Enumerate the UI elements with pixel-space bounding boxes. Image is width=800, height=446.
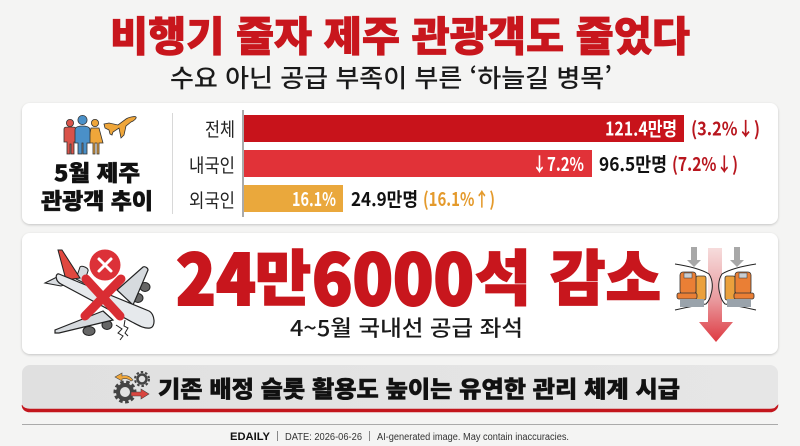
bar chart: total: 전체: [205, 115, 235, 142]
bar chart: domestic: ↓7.2%: [532, 150, 584, 177]
footer: DATE: 2026-06-26: [285, 432, 362, 443]
main figure: 감소: [550, 231, 661, 318]
bar chart: foreign: 24.9만명: [351, 185, 418, 212]
bar chart: total: (3.2%↓): [691, 114, 760, 142]
main figure: [176, 225, 661, 326]
bar chart: domestic: [189, 150, 738, 178]
panel: policy message: [22, 365, 778, 412]
panel heading: 관광객 추이: [41, 184, 153, 216]
figure caption: 4~5월 국내선 공급 좌석: [290, 311, 523, 343]
bar chart: domestic: 96.5만명: [599, 150, 667, 177]
icon: grounded airplane: [45, 250, 154, 340]
policy text: 기존 배정 슬롯 활용도 높이는 유연한 관리 체계 시급: [158, 370, 680, 404]
footer: EDAILY: [230, 431, 271, 443]
bar chart: total: [205, 114, 760, 142]
icon: seats and down arrow: [675, 247, 756, 342]
panel heading: [41, 156, 153, 216]
main figure: 6000: [312, 225, 474, 326]
main figure: 24: [176, 225, 256, 326]
icon: family and airplane: [64, 115, 136, 154]
panel heading: 5월 제주: [54, 156, 140, 188]
bar chart: foreign: 외국인: [189, 186, 235, 213]
bar chart: foreign: (16.1%↑): [423, 185, 495, 212]
bar chart: foreign: [189, 185, 495, 213]
bar chart: domestic: (7.2%↓): [672, 150, 738, 177]
footer: [230, 431, 569, 443]
subtitle: 수요 아닌 공급 부족이 부른 ‘하늘길 병목’: [170, 59, 612, 95]
bar chart: total: 121.4만명: [605, 114, 677, 142]
bar chart: foreign: 16.1%: [292, 185, 336, 212]
bar chart: domestic: 내국인: [189, 151, 235, 178]
panel: May Jeju tourist trend: [22, 103, 778, 224]
footer: AI-generated image. May contain inaccuracies.: [377, 432, 569, 443]
icon: gears and arrows: [115, 372, 149, 402]
main figure: 만: [255, 231, 311, 318]
panel: seat reduction: [22, 225, 778, 354]
title: 비행기 줄자 제주 관광객도 줄었다: [110, 3, 690, 63]
main figure: 석: [475, 231, 531, 318]
